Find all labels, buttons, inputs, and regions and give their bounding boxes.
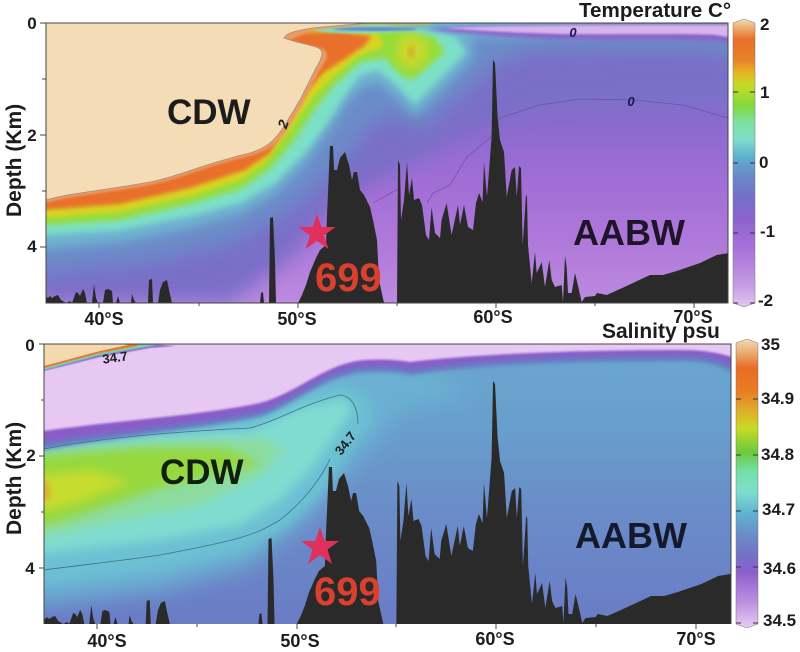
latitude labels: 40°S — [87, 631, 127, 651]
contour label 2: 2 — [274, 117, 292, 131]
depth ticks — [40, 23, 46, 247]
colorbar labels: 34.6 — [763, 559, 796, 578]
axis: temperature depth — [3, 14, 713, 329]
low salinity surface layer — [44, 344, 730, 432]
seafloor — [41, 381, 737, 624]
colorbar labels: -2 — [758, 291, 773, 310]
star: site 699 — [298, 214, 336, 249]
depth title: Depth (Km) — [3, 104, 26, 217]
temperature field — [30, 10, 740, 303]
colorbar: temperature — [579, 0, 775, 310]
latitude labels — [87, 629, 716, 651]
colorbar ticks — [733, 92, 755, 303]
latitude labels: 50°S — [277, 309, 317, 329]
depth ticks — [39, 344, 44, 568]
AABW label: AABW — [573, 212, 685, 253]
depth numbers — [27, 14, 37, 256]
depth numbers: 0 — [25, 336, 35, 355]
CDW label: CDW — [160, 453, 244, 492]
colorbar title: Salinity psu — [602, 320, 720, 343]
latitude labels: 60°S — [475, 629, 515, 649]
latitude ticks — [99, 303, 694, 308]
depth numbers: 2 — [27, 126, 37, 145]
latitude labels: 40°S — [84, 309, 124, 329]
latitude labels: 70°S — [673, 307, 713, 327]
low salinity fringe — [44, 353, 730, 452]
colorbar labels: 34.8 — [761, 445, 794, 464]
colorbar labels: -1 — [760, 222, 775, 241]
salinity field — [30, 330, 745, 624]
seafloor — [44, 60, 735, 303]
depth numbers: 0 — [27, 14, 37, 33]
star: site 699 — [301, 527, 339, 564]
panel: salinity section — [30, 330, 745, 624]
depth numbers — [25, 336, 36, 578]
warm edge of CDW — [40, 23, 370, 204]
colorbar ramp — [733, 19, 755, 307]
contour label 0 deep: 0 — [627, 94, 635, 109]
surface streak — [314, 24, 402, 34]
colorbar: salinity — [602, 320, 796, 630]
colorbar labels: 34.9 — [761, 389, 794, 408]
colorbar labels: 2 — [760, 15, 769, 34]
site number: 699 — [314, 570, 381, 614]
contour label CDW: 34.7 — [332, 429, 359, 458]
CDW label: CDW — [167, 93, 251, 132]
colorbar labels — [761, 335, 796, 630]
latitude labels: 50°S — [280, 631, 320, 651]
depth numbers: 2 — [26, 446, 36, 465]
colorbar ticks — [736, 399, 758, 623]
latitude ticks — [97, 624, 696, 629]
site number: 699 — [315, 256, 382, 300]
frame — [46, 23, 728, 303]
saline surface wedge — [44, 344, 176, 371]
contour label 0 surface: 0 — [569, 25, 577, 40]
colorbar labels: 34.5 — [763, 611, 796, 630]
frame — [44, 344, 731, 624]
depth numbers: 4 — [25, 559, 35, 578]
AABW label: AABW — [575, 515, 687, 556]
depth title: Depth (Km) — [3, 422, 26, 535]
latitude labels: 70°S — [676, 629, 716, 649]
0 degree contour — [373, 99, 728, 203]
colorbar ramp — [736, 339, 758, 628]
latitude labels — [84, 307, 713, 329]
34.7 contour — [44, 395, 358, 570]
cold surface layer — [425, 24, 740, 46]
colorbar labels: 0 — [759, 153, 768, 172]
CDW warm core — [40, 23, 367, 201]
colorbar labels: 34.7 — [762, 500, 795, 519]
depth numbers: 4 — [27, 237, 37, 256]
warm water at surface — [350, 23, 430, 25]
panel: temperature section — [30, 10, 740, 303]
axis: salinity depth — [3, 336, 716, 651]
colorbar labels — [758, 15, 775, 310]
latitude labels: 60°S — [473, 307, 513, 327]
colorbar labels: 35 — [761, 335, 780, 354]
colorbar labels: 1 — [760, 83, 769, 102]
contour label surface: 34.7 — [101, 348, 129, 367]
